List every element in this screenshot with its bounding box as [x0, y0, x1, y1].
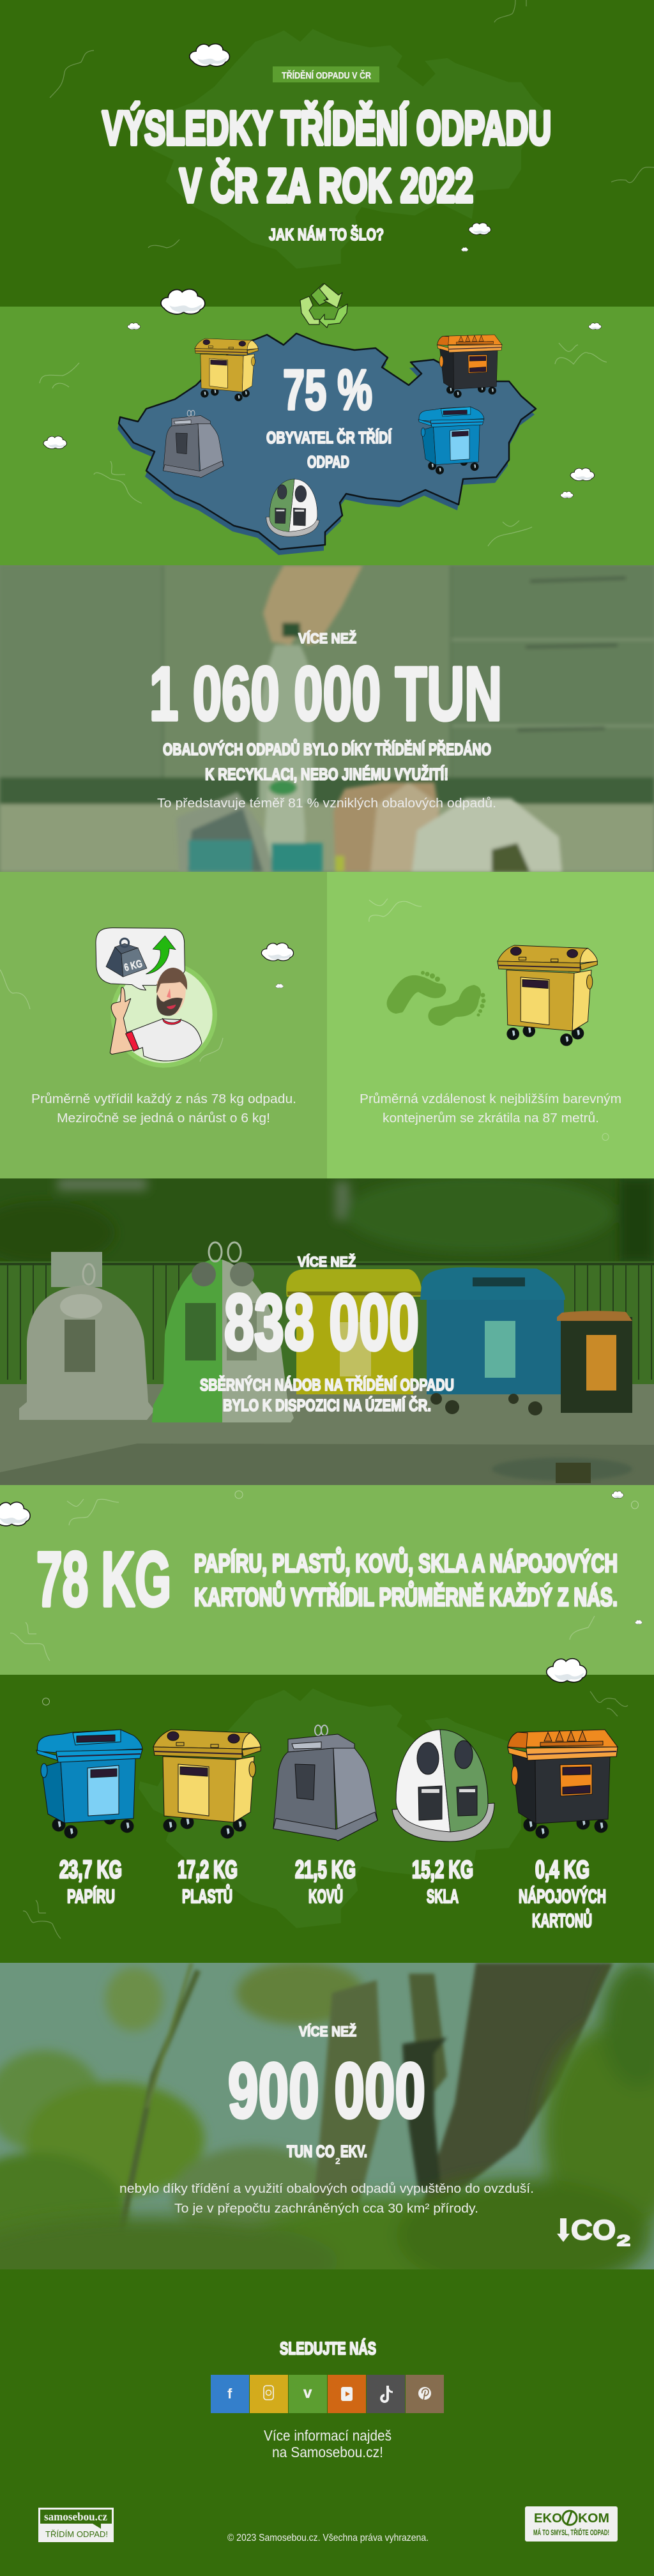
bin on map: paper — [418, 407, 484, 474]
stat: 900 000 — [119, 2023, 534, 2216]
photo: cartons container — [557, 1311, 632, 1413]
stat: 838 000 — [200, 1254, 454, 1415]
icon: footprints — [387, 971, 485, 1026]
stat: 1 060 000 tun: 1 060 000 TUN — [149, 652, 502, 736]
clouds — [261, 943, 294, 988]
photo: plastics container — [286, 1269, 422, 1394]
stat: 900 000: EKV. — [340, 2142, 367, 2161]
container: beverage cartons: 0,4 KG — [535, 1856, 589, 1884]
stat: 78 kg: 78 KG — [36, 1536, 171, 1622]
panel: footer — [0, 2269, 654, 2576]
text: more info: Více informací najdeš — [264, 2427, 392, 2444]
container: beverage cartons: KARTONŮ — [532, 1909, 592, 1932]
panel: forest photo — [0, 1963, 654, 2269]
heading: follow us: SLEDUJTE NÁS — [280, 2338, 376, 2358]
container: glass: SKLA — [427, 1886, 459, 1907]
illustration: man with speech bubble — [96, 928, 217, 1068]
stat: 900 000: nebylo díky třídění a využití obalových odpadů vypuštěno do ovzduší. — [119, 2182, 534, 2196]
panel: average sorted waste — [0, 872, 327, 1178]
title: V ČR ZA ROK 2022 — [179, 159, 473, 212]
stat: 838 000: VÍCE NEŽ — [298, 1254, 356, 1270]
map of Czechia — [118, 333, 536, 555]
logo: EKO-KOM — [525, 2506, 618, 2542]
social icons: v — [303, 2384, 312, 2402]
icon: CO2 reduction: CO — [571, 2214, 616, 2246]
label pill — [273, 66, 379, 82]
illustration: man with speech bubble: 6 KG — [123, 957, 144, 974]
text: average sorted amount: Meziročně se jedná o nárůst o 6 kg! — [57, 1111, 270, 1125]
container: beverage cartons — [508, 1730, 618, 1932]
bin on map: cartons — [437, 335, 502, 398]
stat: 75 %: 75 % — [283, 358, 372, 422]
icon: CO2 reduction — [557, 2214, 630, 2250]
text: average sorted amount — [31, 1092, 296, 1125]
text: distance: kontejnerům se zkrátila na 87 metrů. — [383, 1111, 599, 1125]
stat: 838 000: 838 000 — [224, 1279, 419, 1367]
text: average sorted amount: Průměrně vytřídil každý z nás 78 kg odpadu. — [31, 1092, 296, 1106]
bin on map: metal — [164, 410, 224, 478]
icon: yellow container — [498, 945, 597, 1046]
logo: samosebou.cz — [38, 2508, 114, 2542]
text: average per person — [194, 1546, 618, 1612]
container: plastics — [153, 1730, 261, 1907]
clouds in hero — [190, 44, 490, 252]
container: paper: PAPÍRU — [67, 1886, 115, 1907]
container: plastics: 17,2 KG — [178, 1856, 238, 1884]
social icons: f — [227, 2386, 232, 2402]
bin on map: glass — [266, 479, 319, 537]
section: hero background — [0, 0, 654, 307]
panel: photo of sorting waste — [0, 565, 654, 872]
stat: 900 000: TUN CO — [287, 2142, 335, 2161]
stat: 1 060 000 tun: K RECYKLACI, NEBO JINÉMU VYUŽITÍ! — [205, 765, 448, 784]
stat: 900 000: 2 — [335, 2156, 340, 2166]
text: more info — [264, 2427, 392, 2460]
container: glass — [392, 1730, 494, 1907]
stat: 900 000: VÍCE NEŽ — [299, 2023, 356, 2039]
panel: map section background — [0, 307, 654, 565]
container: metal: KOVŮ — [308, 1884, 343, 1907]
stat: 1 060 000 tun: OBALOVÝCH ODPADŮ BYLO DÍKY TŘÍDĚNÍ PŘEDÁNO — [163, 738, 491, 759]
container: paper — [36, 1730, 142, 1907]
photo: metal container — [19, 1264, 155, 1420]
photo: glass container — [152, 1242, 294, 1422]
copyright: © 2023 Samosebou.cz. Všechna práva vyhrazena. — [227, 2533, 429, 2543]
stat: 75 % — [266, 358, 392, 471]
logo: samosebou.cz: samosebou.cz — [44, 2510, 107, 2523]
stat: 75 %: ODPAD — [307, 452, 349, 471]
subtitle: JAK NÁM TO ŠLO? — [269, 225, 384, 244]
photo: paper container — [420, 1267, 565, 1415]
container: plastics: PLASTŮ — [182, 1884, 232, 1907]
stat: 838 000: BYLO K DISPOZICI NA ÚZEMÍ ČR. — [223, 1396, 431, 1415]
stat: 838 000: SBĚRNÝCH NÁDOB NA TŘÍDĚNÍ ODPADU — [200, 1375, 454, 1394]
label pill: TŘÍDĚNÍ ODPADU V ČR — [282, 70, 371, 81]
stat: 1 060 000 tun: To představuje téměř 81 % vzniklých obalových odpadů. — [157, 796, 496, 811]
logo: EKO-KOM: KOM — [578, 2511, 609, 2526]
title — [102, 102, 551, 212]
clouds — [0, 1491, 643, 1624]
stat: 900 000: To je v přepočtu zachráněných cca 30 km² přírody. — [174, 2202, 478, 2216]
logo: EKO-KOM: EKO — [534, 2511, 562, 2526]
text: distance: Průměrná vzdálenost k nejbližším barevným — [360, 1092, 621, 1106]
panel: 78 kg band — [0, 1485, 654, 1675]
text: more info: na Samosebou.cz! — [272, 2444, 383, 2460]
faint map of Czechia in hero — [139, 29, 547, 269]
text: distance — [360, 1092, 621, 1125]
container: paper: 23,7 KG — [59, 1856, 122, 1884]
clouds around map — [43, 289, 602, 498]
stat: 900 000: 900 000 — [228, 2047, 425, 2134]
logo: samosebou.cz: TŘÍDÍM ODPAD! — [45, 2529, 108, 2539]
panel: containers breakdown — [0, 1659, 654, 1963]
container: metal: 21,5 KG — [295, 1856, 356, 1884]
icon: CO2 reduction: 2 — [617, 2232, 630, 2250]
container: metal — [273, 1725, 377, 1907]
stat: 75 %: OBYVATEL ČR TŘÍDÍ — [266, 428, 392, 447]
social icons — [211, 2375, 444, 2413]
stat: 1 060 000 tun: VÍCE NEŽ — [298, 630, 356, 646]
stat: 1 060 000 tun — [149, 630, 502, 811]
container: glass: 15,2 KG — [412, 1856, 473, 1884]
cloud overlapping band — [547, 1659, 586, 1682]
panel: distance to containers — [327, 872, 654, 1178]
bin on map: plastics — [195, 339, 258, 401]
logo: EKO-KOM: MÁ TO SMYSL, TŘIĎTE ODPAD! — [533, 2527, 609, 2537]
icon: recycling arrows — [300, 284, 347, 328]
container: beverage cartons: NÁPOJOVÝCH — [519, 1886, 606, 1907]
panel: photo of containers — [0, 1178, 654, 1485]
